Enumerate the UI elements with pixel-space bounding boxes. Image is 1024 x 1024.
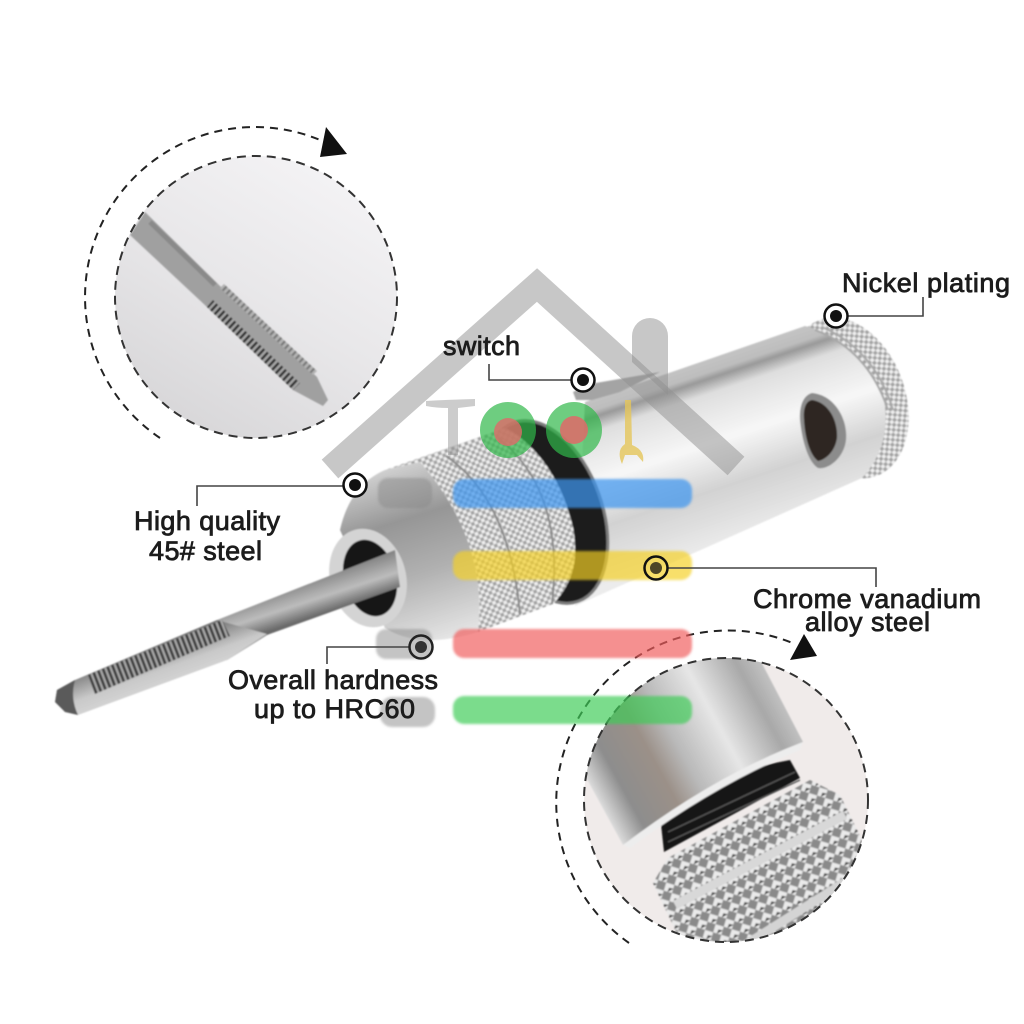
watermark gears: [480, 402, 536, 458]
label: Overall hardness up to HRC60: [228, 636, 438, 724]
knurled collar: [385, 428, 575, 632]
watermark hammer: [426, 399, 475, 455]
label: Chrome vanadium alloy steel: alloy steel: [805, 607, 930, 637]
tap shank: [190, 550, 400, 660]
watermark gray pills: [376, 478, 435, 727]
thread rings at handle end: [815, 327, 893, 410]
watermark wrench: [620, 400, 643, 464]
nose cone: [340, 462, 479, 640]
nose opening: [318, 520, 418, 636]
label: Nickel plating: Nickel plating: [842, 268, 1010, 298]
switch: [573, 372, 660, 400]
watermark roof: [330, 285, 736, 469]
label: Chrome vanadium alloy steel: [644, 556, 981, 637]
dashed rotation arrow: upper left: [85, 127, 347, 438]
black ring: [461, 404, 631, 620]
watermark chimney: [632, 318, 668, 395]
label: Chrome vanadium alloy steel: Chrome vanadium: [753, 584, 981, 614]
label: High quality 45# steel: 45# steel: [149, 536, 262, 566]
end cap knurl: [766, 301, 930, 495]
label: High quality 45# steel: [134, 474, 366, 566]
label: Overall hardness up to HRC60: Overall hardness: [228, 665, 438, 695]
side hole: [800, 393, 846, 468]
label: Nickel plating: [824, 268, 1010, 328]
handle body: [575, 326, 886, 606]
dashed rotation arrow: lower right: [556, 631, 817, 943]
watermark colour bars: [453, 479, 692, 724]
label: switch: [443, 331, 594, 392]
tap flute and tip: [55, 620, 267, 715]
detail circle: knurled end close-up: [582, 650, 880, 950]
watermark logo: [330, 285, 736, 727]
label: Overall hardness up to HRC60: up to HRC60: [254, 694, 415, 724]
label: switch: switch: [443, 331, 520, 361]
detail circle: tap close-up: [115, 156, 397, 438]
label: High quality 45# steel: High quality: [134, 506, 280, 536]
tap wrench tool: [55, 301, 930, 715]
